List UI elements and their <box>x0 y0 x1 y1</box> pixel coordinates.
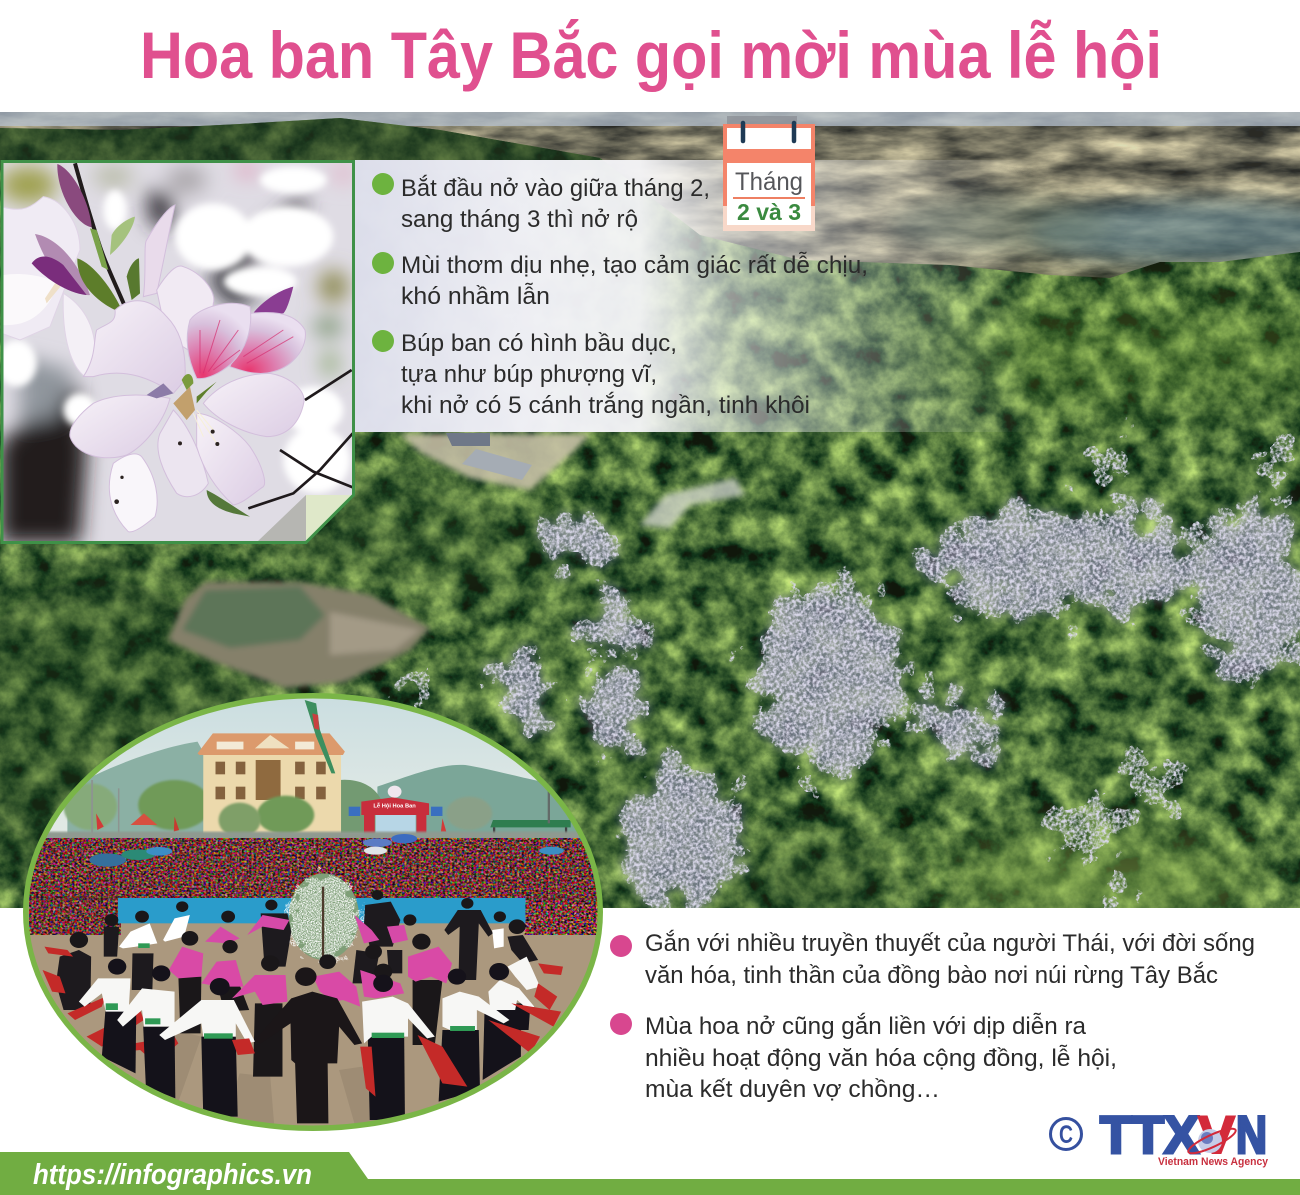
background photo: forest with blooming ban trees <box>0 112 1300 920</box>
hills <box>67 742 584 840</box>
fact: bud shape: tựa như búp phượng vĩ, <box>401 361 657 388</box>
crowd <box>29 834 603 935</box>
calendar dates: 2 và 3 <box>737 199 801 225</box>
front row dancers <box>102 1003 530 1120</box>
website url: https://infographics.vn <box>33 1159 312 1191</box>
flower centre and stamens <box>114 320 293 504</box>
red scarves left <box>43 947 178 1063</box>
building <box>198 700 345 840</box>
calendar icon: Tháng 2 và 3 <box>723 116 815 231</box>
photo: festival dance in oval frame <box>10 690 622 1150</box>
fact: scent <box>372 252 868 310</box>
fact: bud shape: khi nở có 5 cánh trắng ngần, tinh khôi <box>401 392 810 419</box>
panel: flower facts background <box>354 160 1034 432</box>
fact: legends of the Thái people: Gắn với nhiều truyền thuyết của người Thái, với đời sống <box>645 930 1255 957</box>
fact: legends of the Thái people <box>610 930 1255 989</box>
back row dancers <box>56 902 538 1010</box>
festival gate: Lễ Hội Hoa Ban <box>373 803 416 809</box>
fact: scent: Mùi thơm dịu nhẹ, tạo cảm giác rất dễ chịu, <box>401 252 868 279</box>
purple buds <box>32 164 293 315</box>
green roof stall <box>490 820 571 833</box>
distant mountains <box>0 112 1300 278</box>
green sashes <box>106 943 475 1039</box>
fact: blooming time <box>372 173 710 233</box>
flower frame <box>2 162 354 542</box>
TTXVN logo: N <box>1236 1106 1267 1165</box>
fact: bud shape <box>372 330 810 419</box>
blossom haze under clusters <box>488 505 1300 902</box>
logo red V and globe <box>1186 1106 1238 1165</box>
page-curl fold <box>258 495 353 542</box>
man in black, centre front <box>255 967 362 1123</box>
calendar month label: Tháng <box>735 168 803 196</box>
blurred background of branches and blossoms <box>0 160 357 543</box>
logo red V and globe: V <box>1198 1106 1235 1165</box>
fact: festival season: nhiều hoạt động văn hóa cộng đồng, lễ hội, <box>645 1045 1117 1072</box>
centre blossom tree <box>289 873 359 963</box>
fact: blooming time: sang tháng 3 thì nở rộ <box>401 206 638 233</box>
fact: legends of the Thái people: văn hóa, tinh thần của đồng bào nơi núi rừng Tây Bắc <box>645 962 1218 989</box>
fact: bud shape: Búp ban có hình bầu dục, <box>401 330 677 357</box>
photo: ban flower close-up <box>0 160 357 543</box>
cars and fence <box>46 830 580 838</box>
fact: scent: khó nhầm lẫn <box>401 283 550 310</box>
TTXVN logo: Vietnam News Agency <box>1158 1156 1269 1168</box>
copyright symbol: C <box>1059 1121 1073 1149</box>
red scarves right <box>232 963 563 1097</box>
dark stems <box>75 163 125 307</box>
fact: festival season <box>610 1013 1117 1103</box>
front row white tops <box>79 957 540 1043</box>
ground <box>28 900 596 1126</box>
calendar rings <box>743 123 794 141</box>
village buildings <box>400 433 745 528</box>
main flower petals <box>70 205 305 532</box>
TTXVN logo: TTX <box>1100 1106 1199 1165</box>
festival gate <box>349 786 442 838</box>
sky <box>48 698 538 834</box>
trees <box>64 780 492 835</box>
forest <box>0 118 1300 920</box>
title: Hoa ban Tây Bắc gọi mời mùa lễ hội <box>140 18 1162 92</box>
flags and poles <box>91 780 550 837</box>
blossom clusters <box>390 437 1300 906</box>
pond <box>168 582 430 688</box>
fact: festival season: Mùa hoa nở cũng gắn liền với dịp diễn ra <box>645 1013 1086 1040</box>
fact: blooming time: Bắt đầu nở vào giữa tháng 2, <box>401 175 710 202</box>
footer bar with website <box>0 1152 1300 1195</box>
blue barrier <box>118 898 525 923</box>
middle row dancers in pink <box>178 977 442 1077</box>
TTXVN logo <box>1100 1106 1269 1168</box>
front dancers heads <box>108 959 509 995</box>
thin branches <box>248 370 353 508</box>
left flower <box>2 197 95 377</box>
copyright symbol <box>1050 1118 1082 1150</box>
fact: festival season: mùa kết duyên vợ chồng… <box>645 1076 940 1103</box>
